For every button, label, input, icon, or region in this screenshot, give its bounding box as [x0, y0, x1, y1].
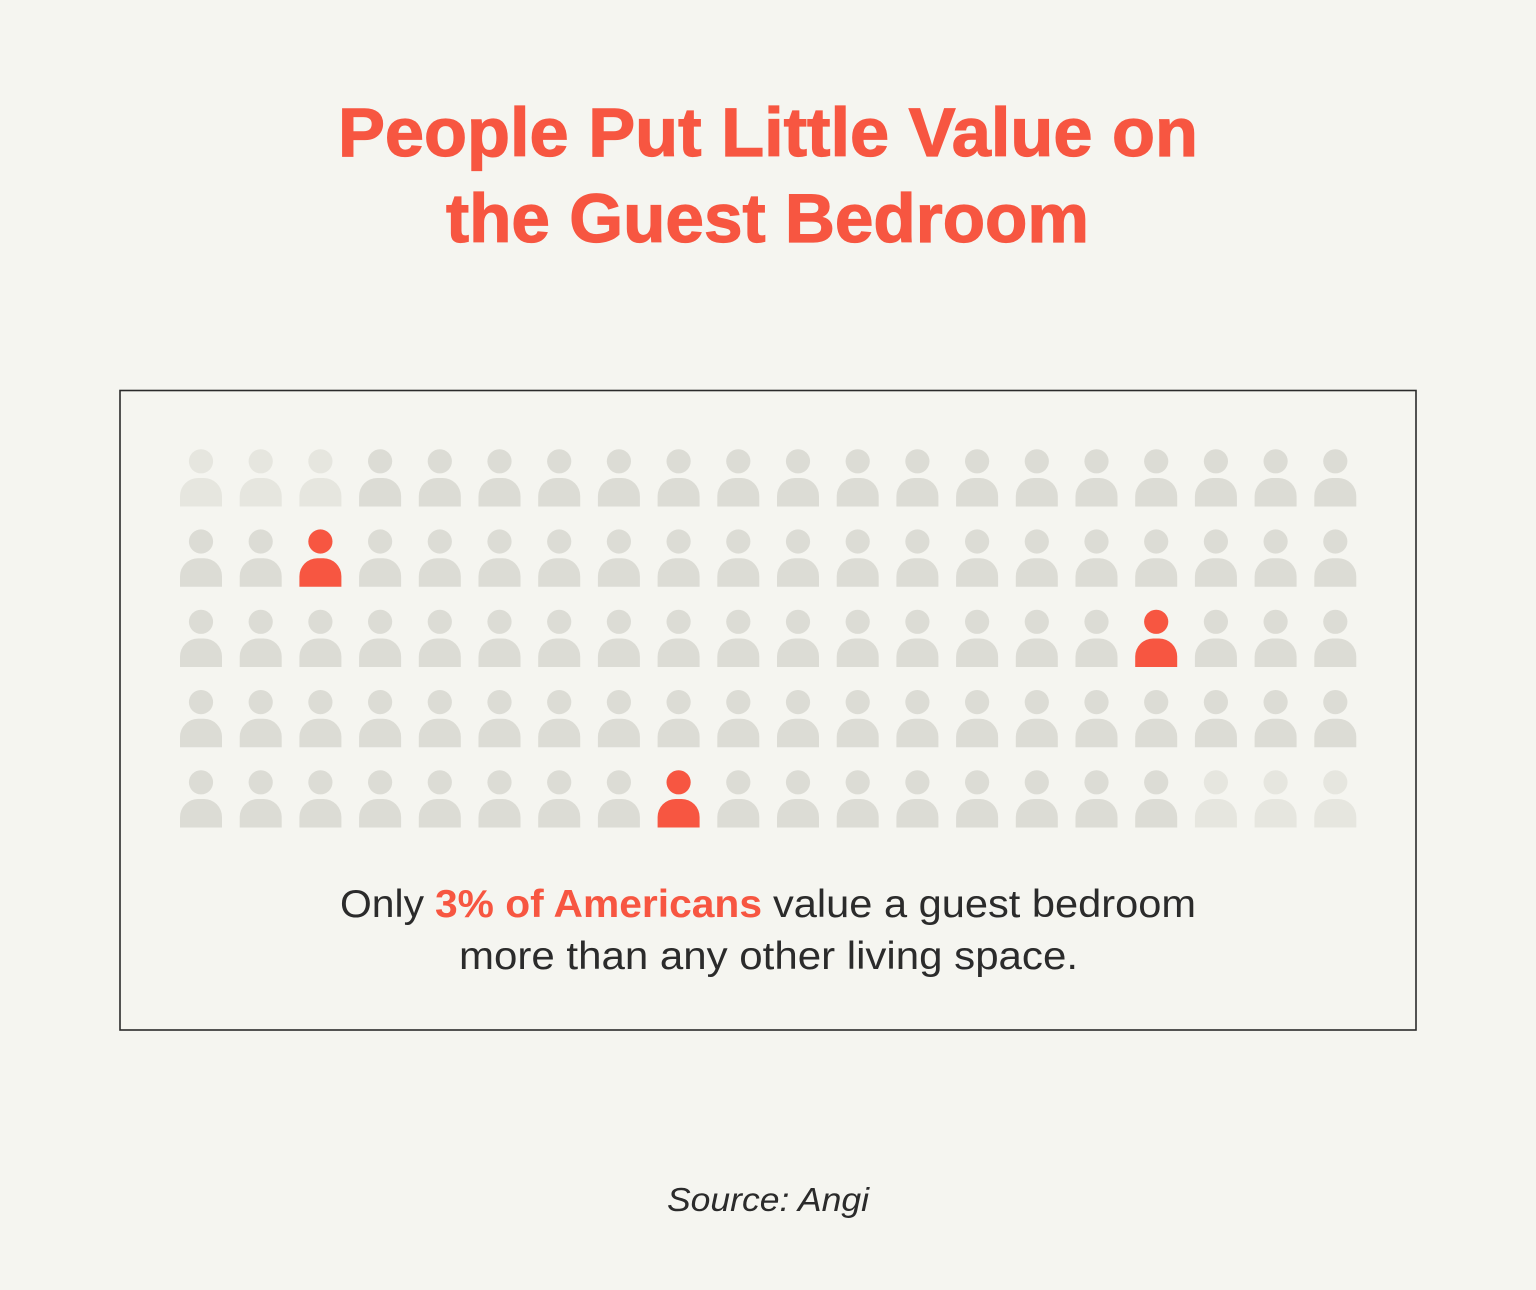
title: People Put Little Value on	[338, 94, 1198, 171]
statistic caption: value a guest bedroom	[773, 883, 1196, 926]
title: the Guest Bedroom	[446, 180, 1089, 257]
row 3 of people, one highlighted	[180, 610, 1356, 667]
row 2 of people, one highlighted	[180, 529, 1356, 587]
statistic caption: Only	[340, 883, 425, 926]
panel: statistic frame	[120, 390, 1416, 1030]
row 4 of people	[180, 690, 1356, 747]
statistic caption: more than any other living space.	[459, 935, 1078, 978]
statistic caption: 3% of Americans	[435, 883, 762, 926]
row 5 of people, one highlighted	[180, 770, 1356, 828]
pictogram: 100 people, 3 highlighted	[180, 449, 1356, 828]
source note: Source: Angi	[667, 1181, 871, 1218]
row 1 of people	[180, 449, 1356, 506]
statistic caption	[340, 883, 1196, 978]
title	[338, 94, 1198, 257]
